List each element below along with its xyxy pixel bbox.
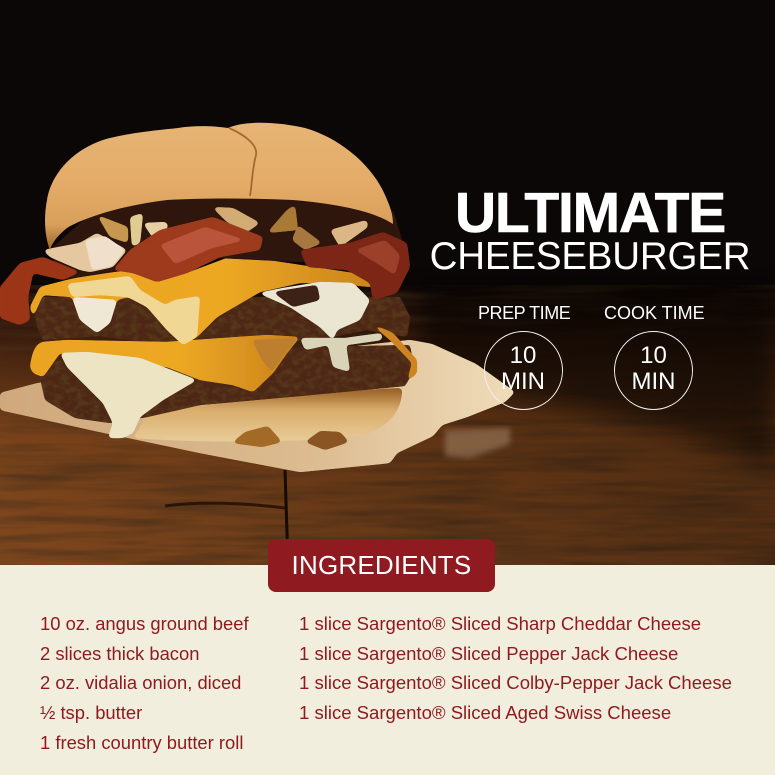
- lower cheddar cheese: [30, 335, 300, 392]
- ingredients list left: 2 oz. vidalia onion, diced: [40, 672, 241, 693]
- onions: [43, 205, 368, 272]
- caramelized onion pieces: [232, 426, 349, 450]
- ingredients heading badge: INGREDIENTS: [292, 550, 471, 580]
- upper white cheese left: [72, 297, 117, 333]
- ingredients list left: 1 fresh country butter roll: [40, 732, 243, 753]
- bun crease: [229, 128, 256, 196]
- title: ultimate cheeseburger: ULTIMATE: [455, 181, 725, 245]
- prep time label: PREP TIME: [478, 303, 570, 323]
- ingredients list left: 10 oz. angus ground beef: [40, 613, 249, 634]
- lower white cheese: [60, 352, 197, 438]
- ingredients panel background: [0, 565, 775, 775]
- title: ultimate cheeseburger: [430, 181, 750, 278]
- cook time circle: 10: [640, 342, 667, 369]
- melted pale cheese drip: [300, 333, 382, 372]
- upper white cheese right: [258, 282, 370, 340]
- cook time circle: [614, 331, 693, 410]
- bacon: [0, 217, 410, 325]
- top bun: [45, 123, 393, 250]
- ingredients heading badge: [268, 539, 495, 592]
- cook time circle: MIN: [632, 368, 676, 395]
- prep time circle: 10: [510, 342, 536, 369]
- upper patty: [35, 297, 410, 346]
- ingredients list left: [40, 613, 249, 753]
- ingredients list right: 1 slice Sargento® Sliced Aged Swiss Cheese: [299, 702, 671, 723]
- photo: cheeseburger on wooden table: [0, 0, 775, 565]
- ingredients list right: [299, 613, 732, 723]
- prep time circle: MIN: [501, 368, 545, 395]
- ingredients list right: 1 slice Sargento® Sliced Colby-Pepper Jack Cheese: [299, 672, 732, 693]
- ingredients list right: 1 slice Sargento® Sliced Pepper Jack Cheese: [299, 643, 678, 664]
- cook time label: COOK TIME: [604, 303, 705, 323]
- title: ultimate cheeseburger: CHEESEBURGER: [430, 235, 750, 278]
- ingredients list left: 2 slices thick bacon: [40, 643, 199, 664]
- right thin cheese: [370, 323, 417, 382]
- bottom bun: [133, 388, 402, 441]
- lower patty: [40, 345, 414, 423]
- wood table: [0, 285, 775, 565]
- meat through cheese: [273, 285, 320, 307]
- prep time circle: [484, 331, 562, 410]
- upper cheddar cheese: [30, 258, 380, 345]
- parchment paper: [0, 340, 515, 472]
- ingredients list right: 1 slice Sargento® Sliced Sharp Cheddar Cheese: [299, 613, 701, 634]
- pale cheese streaks: [67, 276, 200, 345]
- ingredients list left: ½ tsp. butter: [40, 702, 142, 723]
- filling shadow under bun: [50, 190, 405, 280]
